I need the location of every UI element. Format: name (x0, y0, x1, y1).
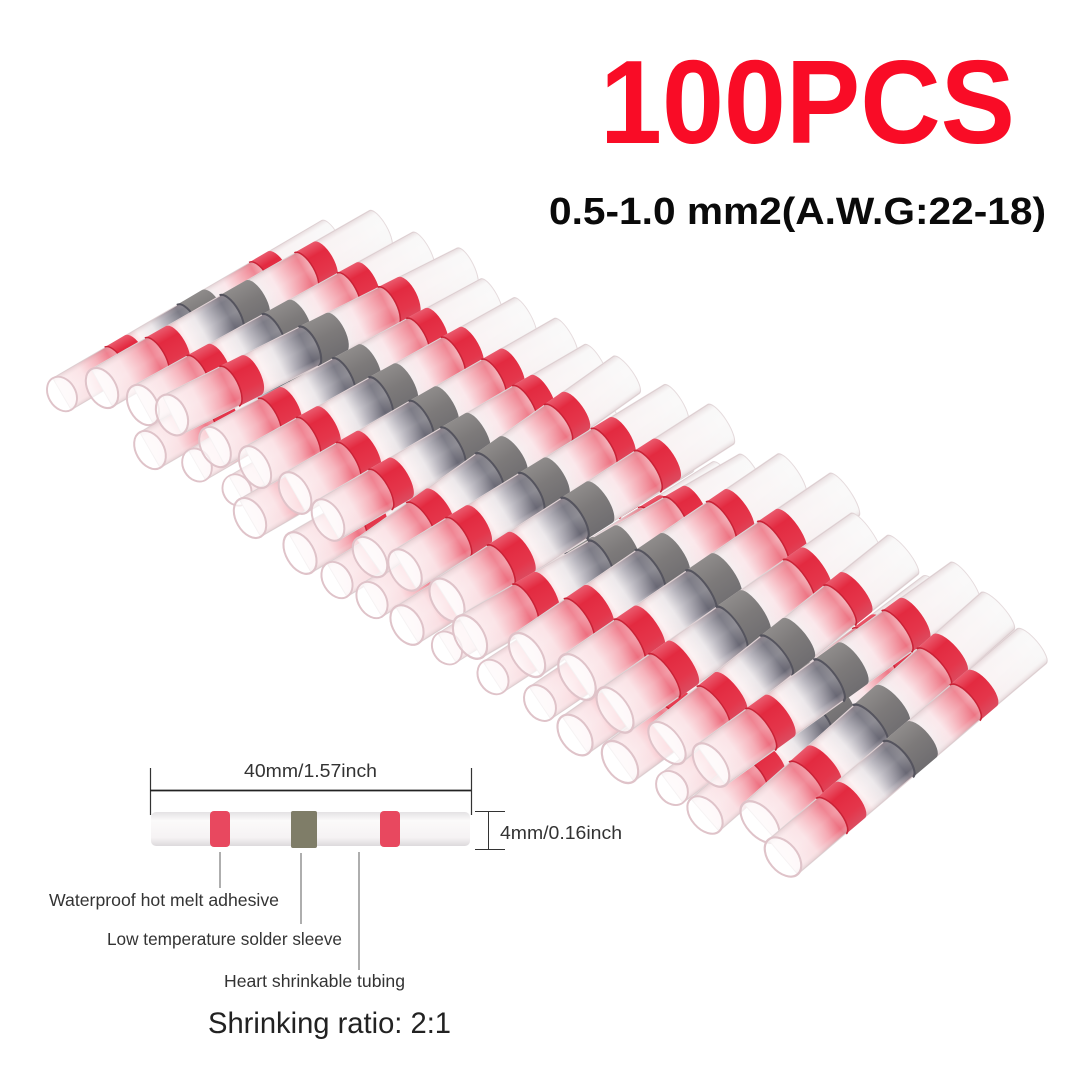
connectors: front row (79, 207, 1052, 884)
height dimension: 4mm (475, 811, 622, 850)
length dimension: 40mm: 40mm/1.57inch (244, 761, 377, 781)
callout: hot melt adhesive: Waterproof hot melt adhesive (49, 890, 279, 910)
callout: solder sleeve: Low temperature solder sleeve (107, 929, 342, 949)
dimension diagram (49, 761, 622, 1040)
callout: shrinkable tubing: Heart shrinkable tubing (224, 971, 405, 991)
subtitle: wire size: 0.5-1.0 mm2(A.W.G:22-18) (549, 191, 1046, 233)
length dimension: 40mm (150, 761, 472, 815)
product photo: pile of solder seal connectors (41, 207, 1052, 884)
title: 100PCS: 100PCS (600, 36, 1015, 169)
connectors: back row (41, 217, 965, 841)
height dimension: 4mm: 4mm/0.16inch (500, 823, 622, 843)
single connector illustration (151, 811, 470, 848)
shrinking ratio note: Shrinking ratio: 2:1 (208, 1007, 451, 1040)
